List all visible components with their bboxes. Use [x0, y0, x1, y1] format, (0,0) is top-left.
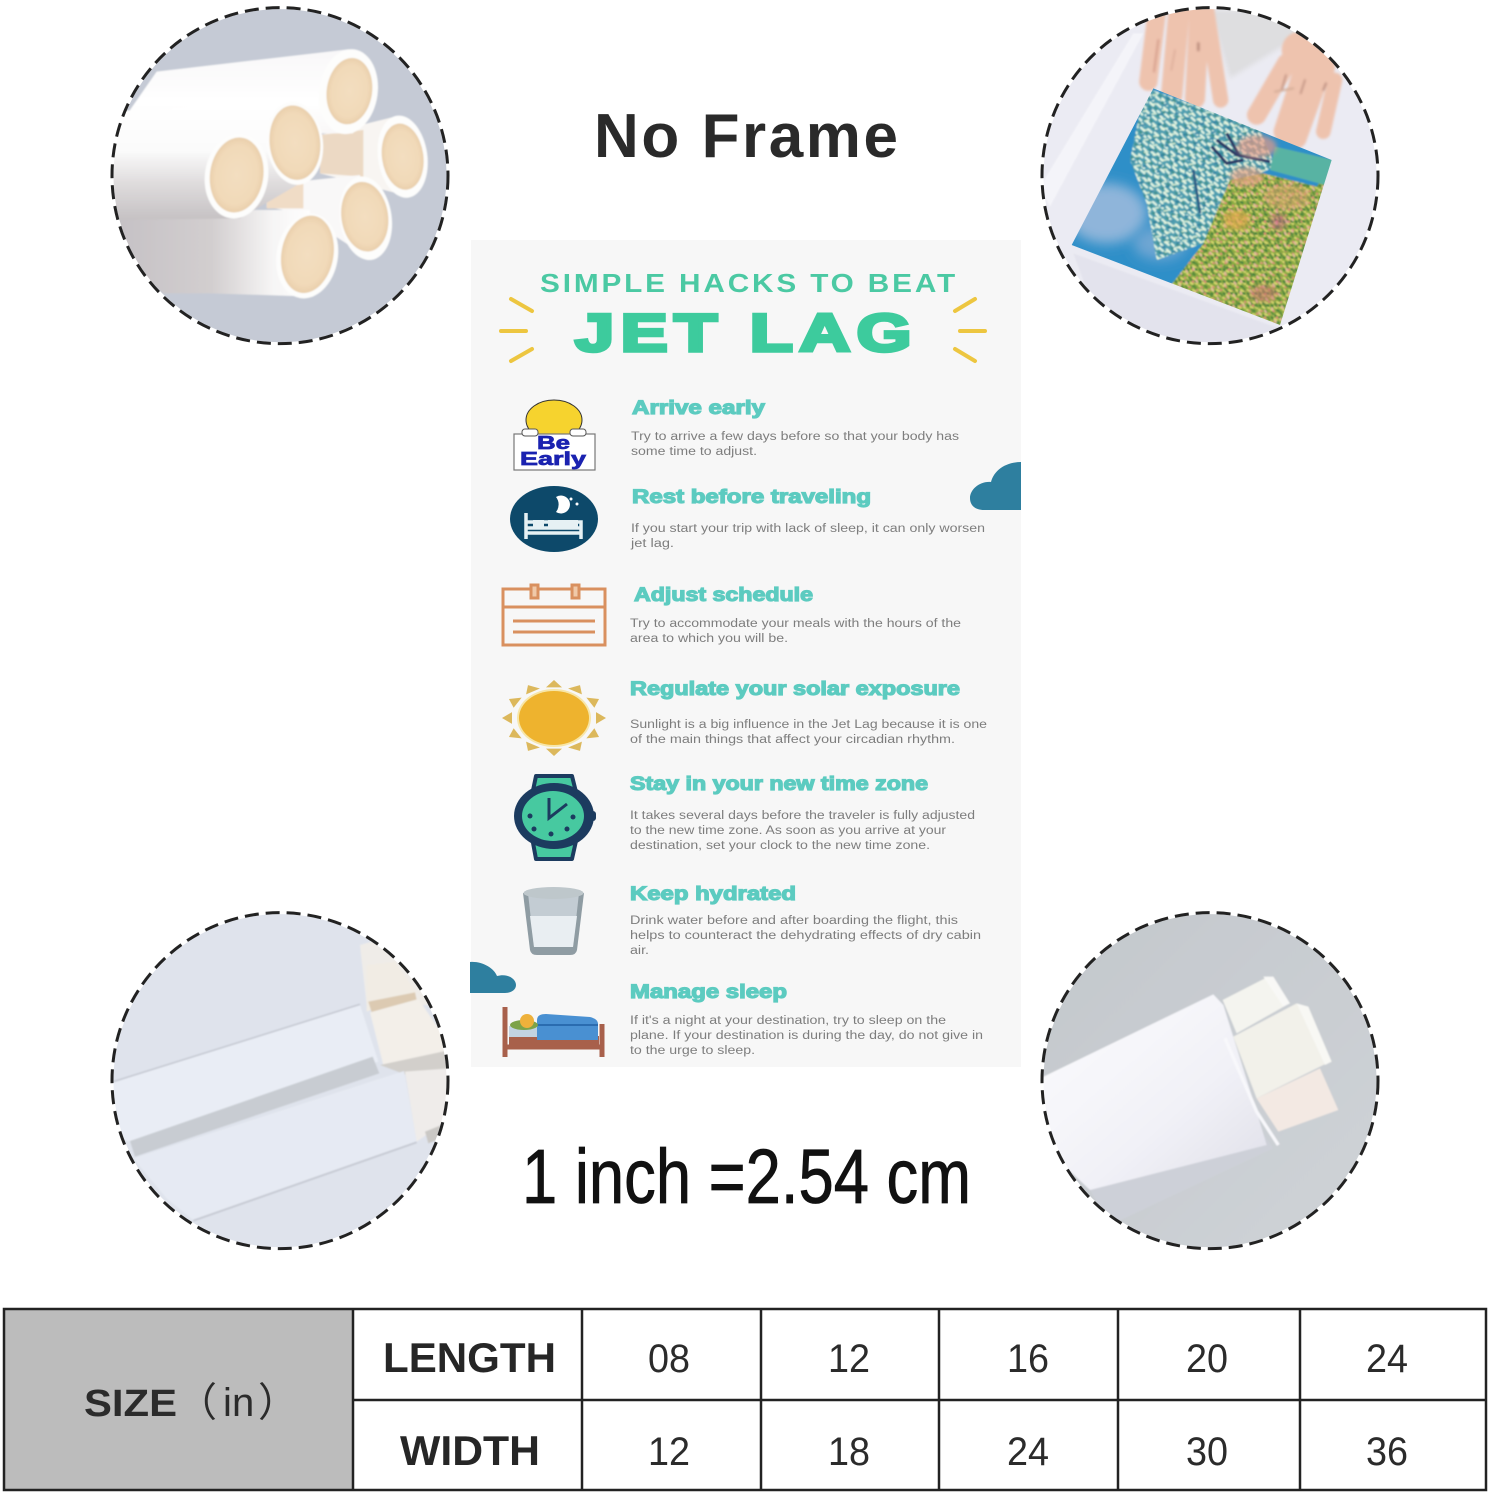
size label: SIZE [84, 1383, 177, 1425]
step: manage sleep [630, 982, 983, 1057]
step: rest before traveling [630, 487, 985, 550]
unit note: 1 inch = 2.54 cm: 1 inch =2.54 cm [522, 1134, 971, 1220]
step: regulate your solar exposure [630, 679, 987, 746]
tube end E [340, 177, 393, 261]
title: No Frame: No Frame [594, 102, 898, 171]
tube body left [114, 110, 296, 218]
left hand [1148, 0, 1221, 100]
cloud right [970, 462, 1021, 510]
width values: 30 [1186, 1430, 1228, 1474]
tube end C [204, 136, 268, 219]
photo circle: hands holding canvas print [1030, 0, 1390, 353]
tube end D [378, 115, 428, 198]
row headers [383, 1334, 556, 1474]
row headers: WIDTH [400, 1427, 540, 1474]
width values: 36 [1366, 1430, 1408, 1474]
poster heading: JET LAG [575, 304, 918, 363]
size table [4, 1309, 1486, 1490]
step: rest before traveling: jet lag. [630, 538, 674, 550]
icon: calendar [503, 585, 605, 645]
icon: wristwatch [514, 776, 596, 859]
step: adjust schedule [630, 585, 961, 645]
icon: sun [502, 680, 606, 756]
photo circle: stack of white tubes [100, 0, 460, 353]
step: rest before traveling: Rest before traveling [632, 487, 871, 508]
step: stay in your new time zone [630, 774, 975, 852]
step: arrive early [631, 398, 959, 458]
step: stay in your new time zone: to the new time zone. As soon as you arrive at your [630, 825, 946, 837]
icon: be early: Be [537, 433, 570, 453]
step: keep hydrated: air. [630, 945, 649, 957]
size label: （in） [177, 1381, 298, 1425]
step: stay in your new time zone: Stay in your new time zone [630, 774, 928, 795]
cloud left [470, 962, 516, 993]
length values: 16 [1007, 1337, 1049, 1381]
tube end B [268, 104, 324, 186]
step: stay in your new time zone: destination, set your clock to the new time zone. [630, 840, 930, 852]
row headers: LENGTH [383, 1334, 556, 1381]
step: keep hydrated: helps to counteract the dehydrating effects of dry cabin [630, 930, 981, 942]
yellow rays [501, 299, 985, 361]
icon: bed at night [510, 486, 598, 552]
canvas painting [1072, 88, 1332, 325]
step: manage sleep: to the urge to sleep. [630, 1045, 755, 1057]
width values: 18 [828, 1430, 870, 1474]
step: keep hydrated [630, 884, 981, 957]
length values: 24 [1366, 1337, 1408, 1381]
tube end A [326, 48, 379, 135]
right hand [1257, 50, 1335, 138]
tube body centre-right [277, 174, 360, 244]
step: regulate your solar exposure: Regulate your solar exposure [630, 679, 960, 700]
width values: 24 [1007, 1430, 1049, 1474]
step: manage sleep: If it's a night at your destination, try to sleep on the [630, 1015, 946, 1027]
tube end F [280, 215, 339, 299]
step: manage sleep: plane. If your destination is during the day, do not give in [630, 1030, 983, 1042]
step: regulate your solar exposure: of the main things that affect your circadian rhythm. [630, 734, 955, 746]
width values: 12 [648, 1430, 690, 1474]
step: arrive early: Arrive early [632, 398, 766, 419]
length values [648, 1337, 1408, 1381]
tube body top [130, 49, 354, 134]
icon: be early: Early [520, 449, 586, 469]
tube body bottom [110, 210, 313, 297]
step: arrive early: some time to adjust. [631, 446, 757, 458]
step: arrive early: Try to arrive a few days before so that your body has [631, 431, 959, 443]
step: adjust schedule: Adjust schedule [634, 585, 813, 606]
poster heading: SIMPLE HACKS TO BEAT [540, 268, 958, 298]
length values: 12 [828, 1337, 870, 1381]
step: keep hydrated: Drink water before and after boarding the flight, this [630, 915, 958, 927]
step: regulate your solar exposure: Sunlight is a big influence in the Jet Lag because it is one [630, 719, 987, 731]
photo circle: wrapped tube side view [100, 905, 460, 1258]
poster: jet lag infographic [470, 240, 1021, 1067]
step: stay in your new time zone: It takes several days before the traveler is fully adjusted [630, 810, 975, 822]
width values [648, 1430, 1408, 1474]
photo circle: single white tube [1030, 905, 1390, 1258]
step: rest before traveling: If you start your trip with lack of sleep, it can only worsen [631, 523, 985, 535]
poster heading [540, 268, 958, 363]
icon: be early [514, 400, 595, 470]
length values: 20 [1186, 1337, 1228, 1381]
icon: person in bed [505, 1007, 602, 1057]
icon: glass of water [523, 887, 584, 955]
tube body right [320, 117, 394, 192]
step: adjust schedule: area to which you will be. [630, 633, 788, 645]
step: keep hydrated: Keep hydrated [630, 884, 796, 905]
length values: 08 [648, 1337, 690, 1381]
size label [84, 1381, 298, 1425]
step: adjust schedule: Try to accommodate your meals with the hours of the [630, 618, 961, 630]
step: manage sleep: Manage sleep [630, 982, 787, 1003]
